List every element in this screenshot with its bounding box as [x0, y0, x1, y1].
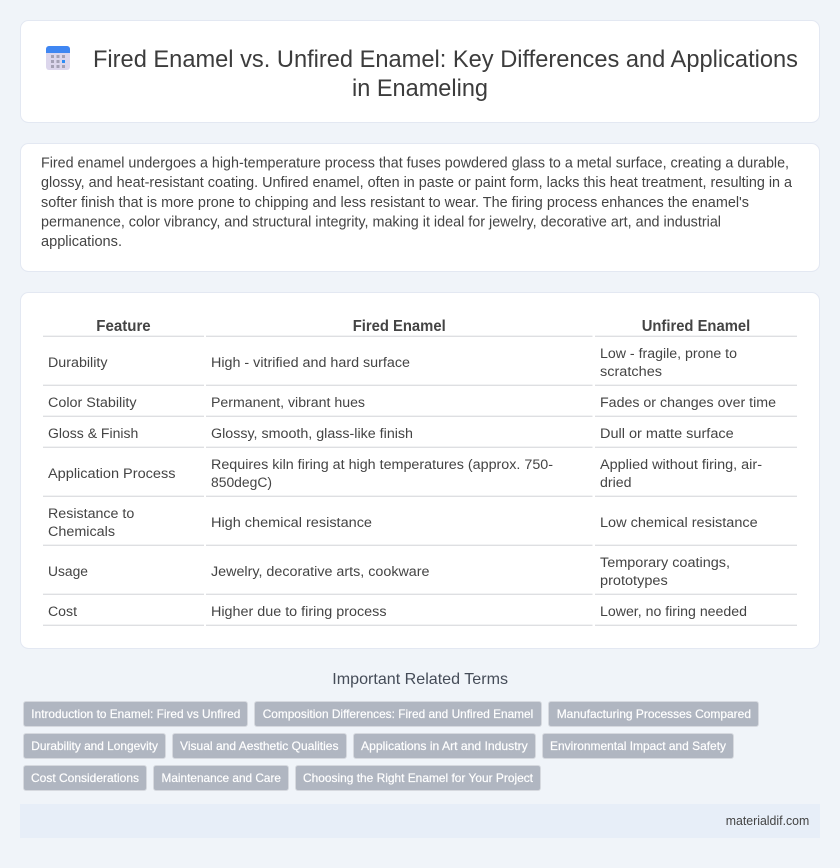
- table row: durability: High - vitrified and hard surface: [211, 355, 410, 371]
- table row: application process: dried: [600, 475, 632, 491]
- table row: durability: Low - fragile, prone to: [600, 346, 737, 362]
- table row: durability: Durability: [48, 355, 108, 371]
- tag: Choosing the Right Enamel for Your Project: [303, 771, 534, 785]
- table header row: Feature: [96, 318, 151, 335]
- tag: [548, 702, 758, 726]
- table header row: Fired Enamel: [353, 318, 446, 335]
- table header row: [43, 318, 797, 336]
- table row: durability: [43, 346, 797, 385]
- text block: introduction paragraph: glossy, and heat-resistant coating. Unfired enamel, often in paste or paint form, lacks this heat treatment, resulting in a: [41, 175, 792, 191]
- table row: resistance to chemicals: [43, 506, 797, 545]
- tag group: related terms: [24, 702, 758, 790]
- table row: resistance to chemicals: Chemicals: [48, 524, 115, 540]
- tag: Manufacturing Processes Compared: [557, 707, 751, 721]
- table row: usage: Usage: [48, 564, 88, 580]
- table header row: Unfired Enamel: [642, 318, 750, 335]
- table row: application process: 850degC): [211, 475, 272, 491]
- table row: resistance to chemicals: High chemical resistance: [211, 515, 372, 531]
- tag: [24, 734, 166, 758]
- table row: color stability: Color Stability: [48, 395, 138, 411]
- tag: Cost Considerations: [31, 771, 139, 785]
- heading: important related terms: Important Related Terms: [332, 671, 508, 688]
- table row: cost: Cost: [48, 604, 77, 620]
- text block: introduction paragraph: [41, 156, 792, 250]
- text block: introduction paragraph: softer finish that is more prone to chipping and less resistant to wear. The firing process enhances the enamel's: [41, 195, 749, 211]
- tag: [254, 702, 542, 726]
- panel: header: [20, 20, 820, 122]
- tag: [154, 766, 288, 790]
- table row: color stability: Permanent, vibrant hues: [211, 395, 365, 411]
- text block: introduction paragraph: Fired enamel undergoes a high-temperature process that fuses powdered glass to a metal surface, creating a durable,: [41, 156, 789, 172]
- table row: usage: prototypes: [600, 573, 668, 589]
- tag: [24, 766, 146, 790]
- table row: gloss and finish: Dull or matte surface: [600, 426, 734, 442]
- icon: calendar grid: [46, 46, 70, 70]
- table row: resistance to chemicals: Resistance to: [48, 506, 134, 522]
- tag: [24, 702, 248, 726]
- tag: [172, 734, 346, 758]
- tag: [296, 766, 540, 790]
- table row: application process: Application Process: [48, 466, 176, 482]
- table row: resistance to chemicals: Low chemical resistance: [600, 515, 758, 531]
- tag: Durability and Longevity: [31, 739, 158, 753]
- footer: [20, 804, 820, 838]
- table row: cost: Lower, no firing needed: [600, 604, 747, 620]
- title: Fired Enamel vs. Unfired Enamel: Key Differences and Applications: [93, 46, 798, 73]
- tag: Introduction to Enamel: Fired vs Unfired: [31, 707, 240, 721]
- tag: Applications in Art and Industry: [361, 739, 528, 753]
- table row: usage: Jewelry, decorative arts, cookware: [211, 564, 430, 580]
- panel: introduction: [20, 144, 820, 272]
- text block: introduction paragraph: permanence, color vibrancy, and structural integrity, making it ideal for jewelry, decorative art, and industrial: [41, 214, 721, 230]
- tag: Composition Differences: Fired and Unfired Enamel: [263, 707, 533, 721]
- table row: application process: Applied without firing, air-: [600, 457, 762, 473]
- table row: usage: Temporary coatings,: [600, 555, 730, 571]
- tag: Maintenance and Care: [162, 771, 281, 785]
- footer: materialdif.com: [726, 814, 809, 828]
- table row: usage: [43, 555, 797, 594]
- table row: durability: scratches: [600, 364, 662, 380]
- table row: color stability: Fades or changes over time: [600, 395, 776, 411]
- tag: Visual and Aesthetic Qualities: [180, 739, 338, 753]
- table row: color stability: [43, 395, 797, 416]
- panel: comparison table: [20, 292, 820, 648]
- table row: gloss and finish: [43, 426, 797, 447]
- table row: cost: Higher due to firing process: [211, 604, 386, 620]
- table row: gloss and finish: Glossy, smooth, glass-like finish: [211, 426, 413, 442]
- table row: gloss and finish: Gloss & Finish: [48, 426, 138, 442]
- tag: [354, 734, 536, 758]
- table row: application process: Requires kiln firing at high temperatures (approx. 750-: [211, 457, 553, 473]
- tag: [542, 734, 734, 758]
- title: [93, 46, 798, 102]
- text block: introduction paragraph: applications.: [41, 234, 122, 250]
- table row: cost: [43, 604, 797, 625]
- title: in Enameling: [352, 75, 488, 102]
- tag: Environmental Impact and Safety: [550, 739, 726, 753]
- table row: application process: [43, 457, 797, 496]
